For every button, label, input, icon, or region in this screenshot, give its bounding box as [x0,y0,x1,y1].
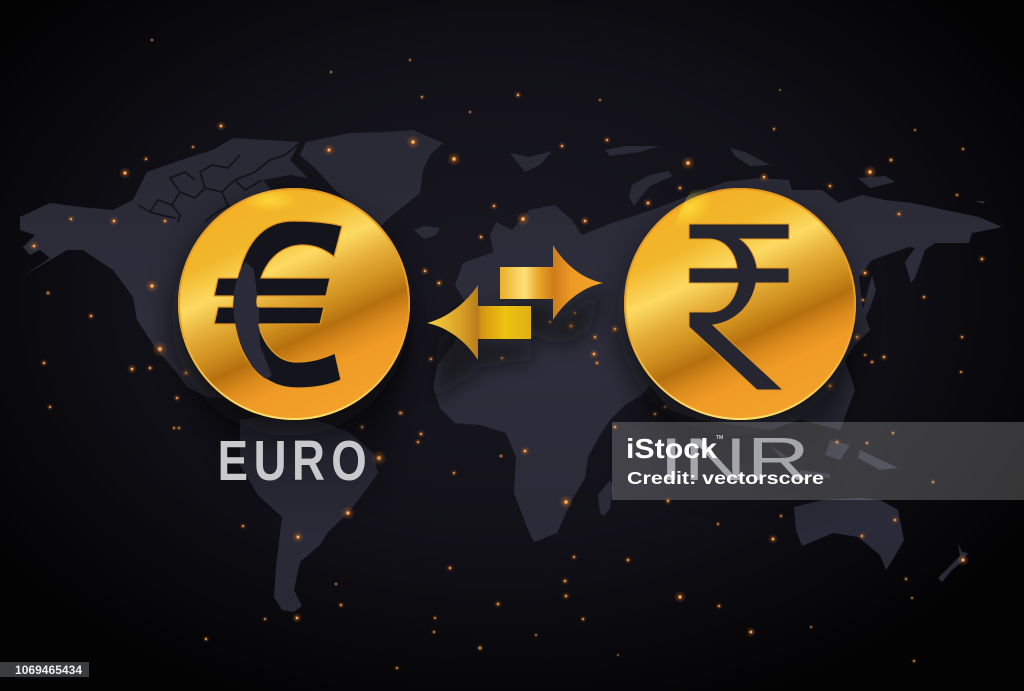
North America [20,138,400,405]
Iceland [414,226,440,239]
watermark text [626,433,824,488]
rupee symbol [689,224,789,390]
image id tag: 1069465434 [15,663,82,677]
Svalbard [510,151,552,172]
trademark: TM [716,435,723,441]
coin shadows [172,200,856,525]
Madagascar [598,480,613,516]
Eurasia [490,178,1002,430]
watermark band [612,422,1024,500]
label: INR: INR [659,426,810,493]
Novaya Zemlya [629,171,672,206]
coin highlight [676,189,708,224]
map seen through euro symbol [233,262,272,380]
Greenland [300,130,443,227]
world map [20,130,1002,612]
euro symbol [214,221,342,388]
Australia [794,498,904,570]
Africa and Arabia [433,250,650,542]
Hudson Bay [263,175,322,200]
coin rim [179,189,409,419]
Arctic islands [605,146,985,204]
euro coin [178,188,410,420]
coin highlight [246,190,292,210]
New Zealand [938,543,968,582]
coin rim [625,189,855,419]
left arrow [427,285,531,360]
iStock logo text: iStock [626,433,717,464]
label: EURO: EURO [218,428,367,492]
Indonesia [770,440,898,478]
rupee coin [624,180,856,420]
credit text: Credit: vectorscore [627,468,824,488]
right arrow [500,245,603,320]
Japan [856,275,876,328]
arctic channels [138,143,300,222]
South America [240,412,378,612]
arrow shadows [432,288,603,402]
